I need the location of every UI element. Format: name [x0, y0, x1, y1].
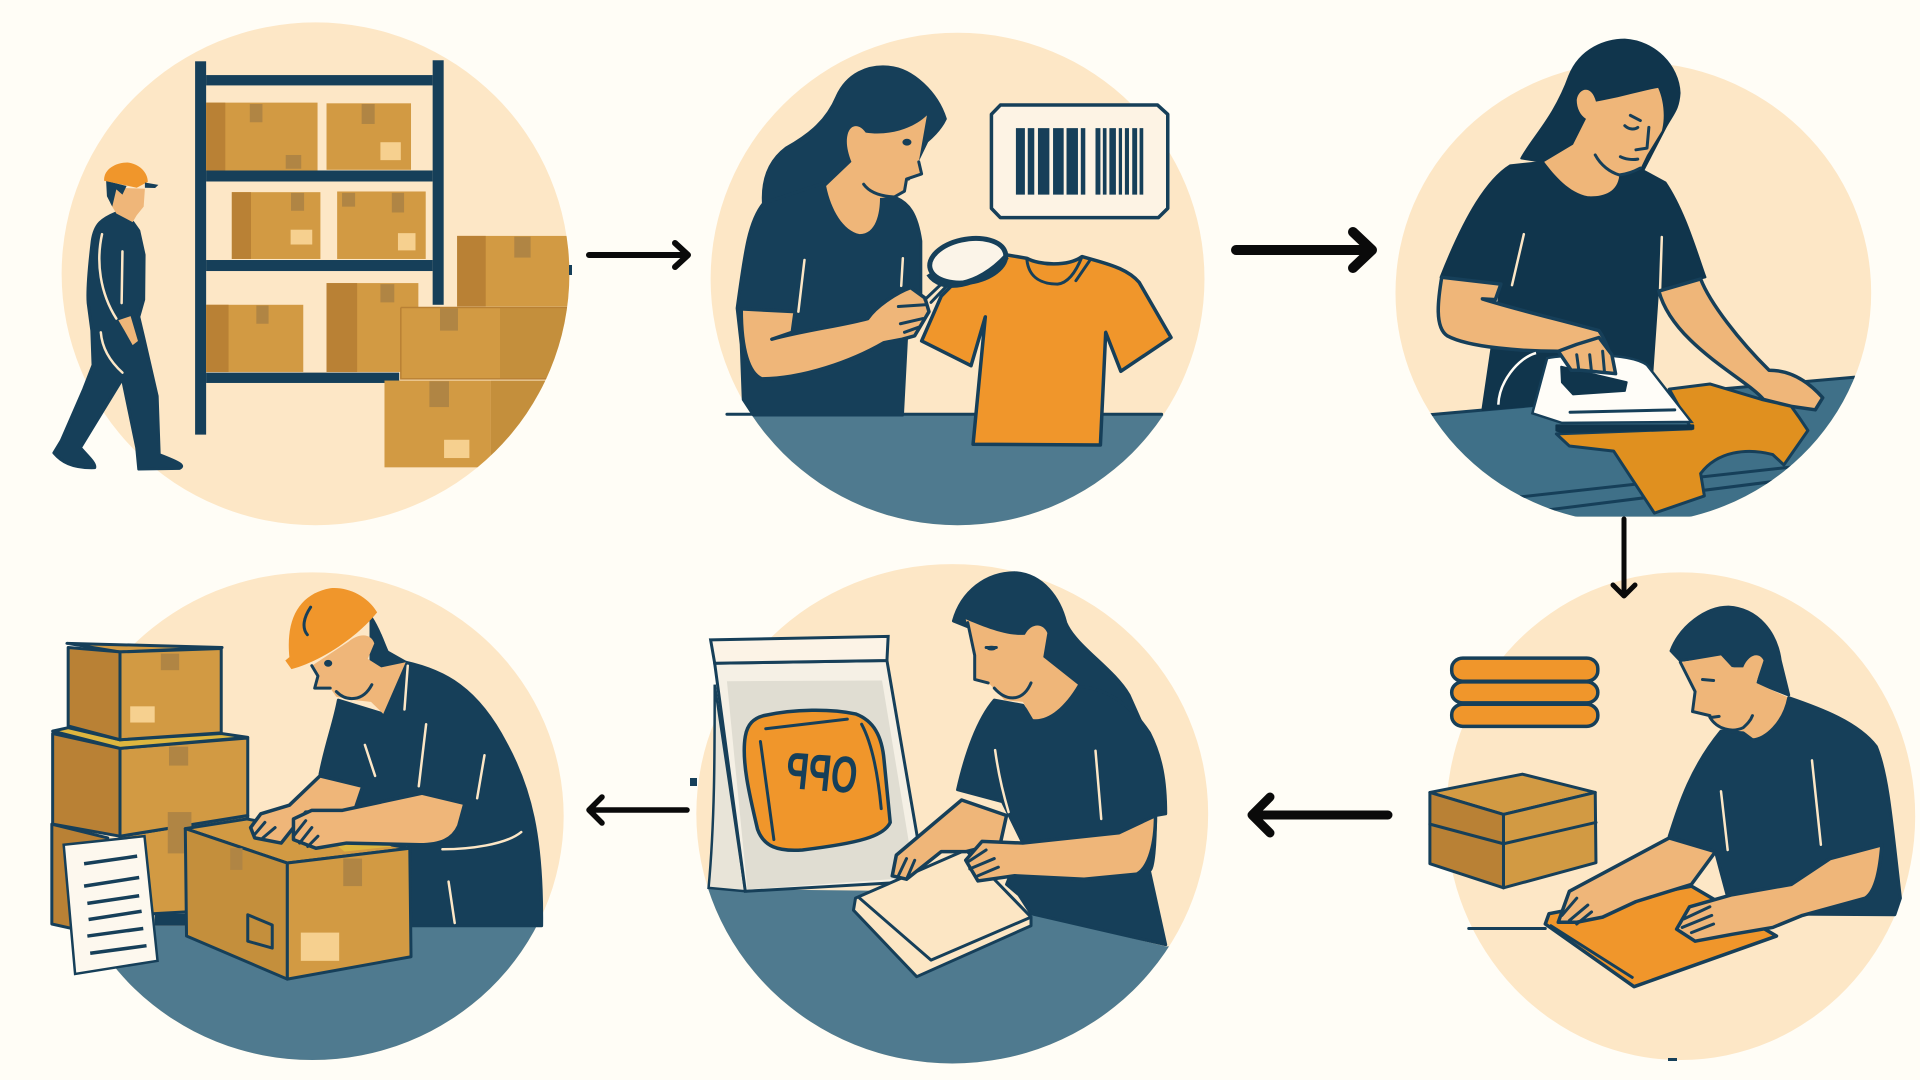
arms and hands: [1558, 838, 1882, 941]
table: [116, 926, 536, 1060]
panel 5: OPP bagging: [680, 564, 1211, 1074]
worker walking: [54, 163, 182, 469]
ironing table: [1430, 376, 1856, 517]
arrow: step 1 to step 2: [589, 243, 688, 267]
OPP bag: [709, 636, 925, 891]
boxes on shelves: [206, 103, 426, 372]
table edge: [1469, 927, 1545, 930]
arrow: step 5 to step 6: [589, 797, 687, 823]
panel 2: quality inspection: [710, 32, 1204, 526]
table: [752, 415, 1164, 526]
bag label text: OPP: [783, 742, 860, 805]
panel 6: final carton packing: [50, 572, 564, 1060]
garment packet: [853, 850, 1031, 977]
iron: [1532, 338, 1693, 432]
woman inspecting: [737, 67, 945, 415]
woman ironing: [1438, 40, 1823, 410]
folded cloth: [1545, 886, 1776, 987]
panel 4: folding: [1430, 572, 1915, 1060]
packing list: [64, 836, 158, 974]
orange garment: [1556, 384, 1808, 513]
arrow: step 4 to step 5: [1252, 797, 1388, 833]
panel 3: ironing: [1396, 38, 1872, 517]
t-shirt: [922, 255, 1171, 445]
folded towels: [1452, 658, 1598, 726]
arms and hands: [892, 800, 1156, 881]
arms and hands: [251, 776, 465, 848]
barcode label: [991, 105, 1168, 218]
panel 1: warehouse shelf retrieval: [54, 22, 571, 525]
magnifying glass: [924, 232, 1012, 302]
stacked boxes on the floor: [384, 236, 571, 470]
woman bagging: [953, 573, 1166, 945]
arrow: step 2 to step 3: [1236, 232, 1372, 268]
arrow: step 3 to step 4: [1613, 519, 1635, 596]
closed box: [1430, 774, 1596, 888]
shelf rack: [195, 60, 444, 435]
front carton: [185, 819, 411, 979]
table: [708, 889, 1169, 1064]
carton stack: [52, 643, 248, 929]
man folding: [1669, 607, 1900, 915]
worker packing: [285, 588, 542, 926]
